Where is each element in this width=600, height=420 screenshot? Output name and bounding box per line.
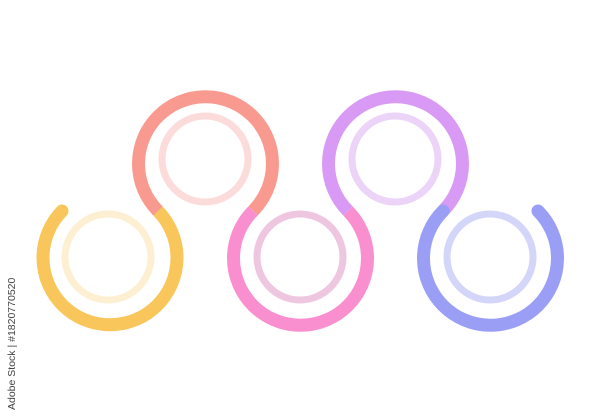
arc: blue <box>424 211 558 325</box>
inner circle: yellow <box>65 214 151 300</box>
inner circle: purple <box>352 116 438 202</box>
arc: pink <box>233 211 368 325</box>
arc: purple <box>328 97 462 211</box>
arc: yellow <box>43 211 177 325</box>
credit text: Adobe Stock | #1820770520 <box>6 278 18 410</box>
inner circle: blue <box>447 214 533 300</box>
inner circle: red <box>162 116 248 202</box>
arc: red <box>138 97 272 211</box>
inner circle: pink <box>257 214 343 300</box>
